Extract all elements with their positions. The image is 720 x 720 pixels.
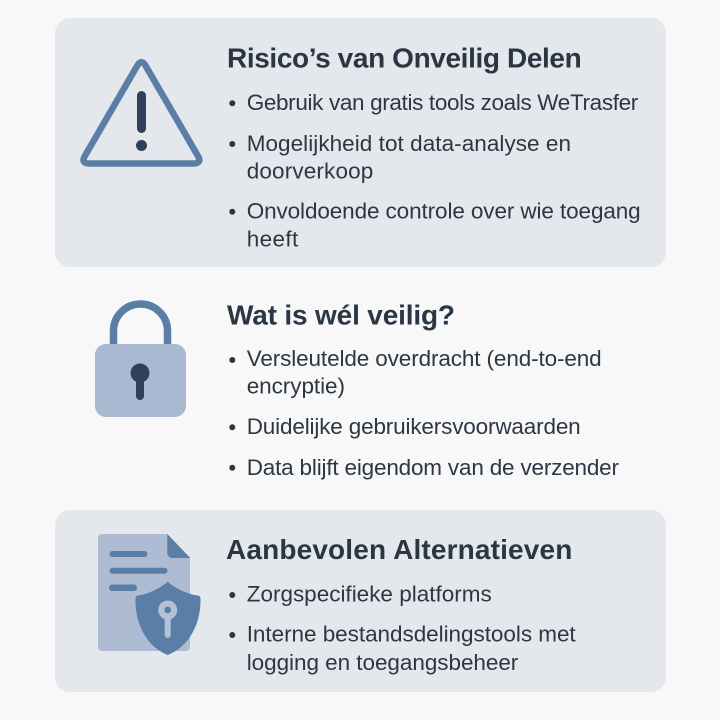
- bullet list: risks: heeft: [247, 226, 299, 251]
- bullet list: safe: Data blijft eigendom van de verzender: [247, 455, 619, 480]
- heading: alternatives: Aanbevolen Alternatieven: [226, 534, 572, 565]
- icon: warning triangle: [84, 62, 199, 164]
- bullet list: safe: [229, 346, 620, 480]
- bullet list: alternatives: Zorgspecifieke platforms: [247, 582, 492, 607]
- icon: document with shield: [98, 534, 201, 655]
- bullet list: risks: [229, 90, 641, 251]
- heading: risks: Risico’s van Onveilig Delen: [227, 42, 582, 73]
- bullet list: safe: Versleutelde overdracht (end-to-end: [247, 346, 602, 371]
- bullet list: risks: doorverkoop: [247, 158, 373, 183]
- bullet list: risks: Gebruik van gratis tools zoals WeTrasfer: [247, 90, 639, 115]
- bullet list: alternatives: logging en toegangsbeheer: [247, 650, 519, 675]
- panel: alternatives: [55, 510, 666, 692]
- bullet list: alternatives: [229, 582, 576, 675]
- bullet list: safe: encryptie): [247, 373, 345, 398]
- bullet list: safe: Duidelijke gebruikersvoorwaarden: [247, 414, 581, 439]
- bullet list: risks: Onvoldoende controle over wie toegang: [247, 198, 641, 223]
- panel: risks: [55, 18, 666, 267]
- panel: safe: [95, 299, 620, 480]
- heading: safe: Wat is wél veilig?: [227, 299, 455, 330]
- bullet list: alternatives: Interne bestandsdelingstools met: [247, 622, 576, 647]
- bullet list: risks: Mogelijkheid tot data-analyse en: [247, 131, 571, 156]
- icon: padlock: [95, 304, 186, 417]
